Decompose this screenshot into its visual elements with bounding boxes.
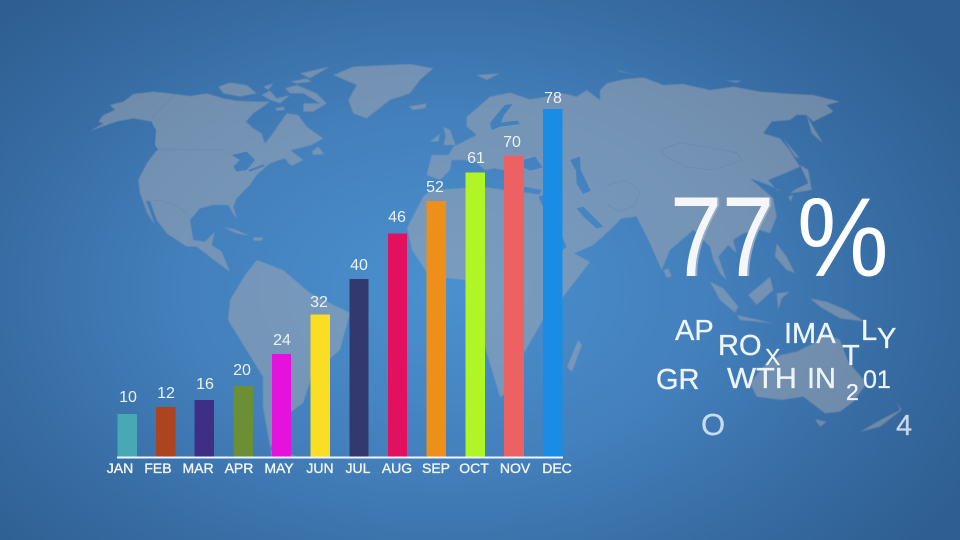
value labels: 61 [467, 150, 485, 167]
bar: JUL [350, 279, 368, 457]
month labels: DEC [542, 460, 572, 476]
month labels: SEP [422, 460, 450, 476]
scattered caption: approximately growth in 2014: O [701, 407, 725, 442]
month labels: NOV [500, 460, 531, 476]
big statistic: 77 % [670, 174, 889, 301]
month labels: MAR [182, 460, 214, 476]
bar: JAN [118, 414, 137, 457]
Asia [600, 70, 840, 280]
South America [228, 260, 350, 458]
Europe and western Asia [427, 90, 633, 257]
big statistic: 77 %: 77 [670, 174, 774, 301]
value labels: 40 [350, 257, 368, 274]
bar: OCT [466, 172, 485, 457]
value labels: 78 [544, 90, 562, 107]
bar: AUG [388, 234, 407, 457]
scattered caption: approximately growth in 2014: RO [718, 330, 762, 362]
value labels: 32 [310, 294, 328, 311]
scattered caption: approximately growth in 2014: WTH [727, 363, 797, 395]
month labels: MAY [264, 460, 294, 476]
bar: APR [234, 386, 253, 457]
Africa [407, 187, 590, 397]
scattered caption: approximately growth in 2014: AP [675, 315, 714, 347]
bar: MAR [194, 400, 214, 457]
big statistic: 77 %: % [797, 175, 889, 300]
value labels: 24 [273, 332, 291, 349]
scattered caption: approximately growth in 2014: 2 [846, 379, 859, 405]
scattered caption: approximately growth in 2014: IMA [784, 318, 836, 350]
month labels: APR [225, 460, 253, 476]
bar: FEB [156, 407, 176, 457]
bar: JUN [310, 314, 330, 457]
month labels: JUN [306, 460, 334, 476]
scattered caption: approximately growth in 2014: X [765, 344, 780, 370]
value labels: 20 [233, 362, 251, 379]
value labels: 12 [157, 385, 175, 402]
scattered caption: approximately growth in 2014: IN [807, 363, 836, 395]
value labels: 10 [119, 389, 137, 406]
month labels [107, 460, 572, 476]
month labels: JUL [346, 460, 371, 476]
month labels: JAN [107, 460, 133, 476]
scattered caption: approximately growth in 2014: T [842, 340, 860, 372]
bar: NOV [504, 156, 524, 457]
Greenland, Iceland, Svalbard, British Isles [333, 64, 500, 145]
country borders [146, 95, 742, 215]
bar: DEC [543, 109, 562, 457]
bar: MAY [272, 354, 291, 457]
value labels: 46 [388, 209, 406, 226]
month labels: OCT [459, 460, 489, 476]
scattered caption: approximately growth in 2014: 4 [896, 410, 912, 442]
bar chart [107, 90, 572, 476]
Oceania and islands [710, 243, 902, 432]
axis line [117, 456, 563, 458]
bar: SEP [426, 201, 446, 457]
scattered caption: approximately growth in 2014: GR [656, 364, 700, 396]
month labels: AUG [382, 460, 412, 476]
North America [90, 67, 330, 272]
scattered caption: approximately growth in 2014 [656, 315, 912, 442]
value labels: 70 [503, 134, 521, 151]
world map [90, 64, 902, 458]
scattered caption: approximately growth in 2014: 01 [863, 366, 891, 394]
month labels: FEB [144, 460, 172, 476]
value labels: 52 [426, 179, 444, 196]
scattered caption: approximately growth in 2014: Y [877, 323, 896, 355]
big statistic: 77 %: 77 [672, 174, 776, 301]
value labels [119, 90, 562, 406]
value labels: 16 [196, 376, 214, 393]
scattered caption: approximately growth in 2014: L [861, 315, 877, 347]
